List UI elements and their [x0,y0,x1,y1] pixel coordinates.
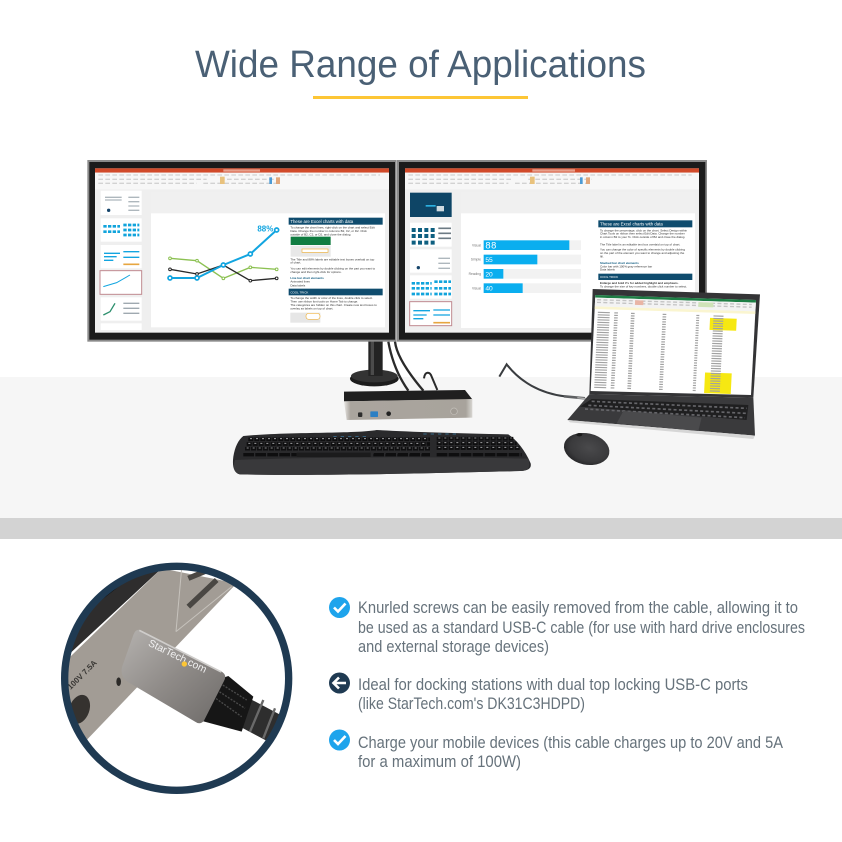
detail photo: cable plugged into dock [63,566,293,790]
feature 2: (like StarTech.com's DK31C3HDPD) [358,695,585,713]
docking station [344,390,472,420]
slide notes: Data labels [290,283,306,287]
braided cable [242,700,279,740]
dock panel [63,568,237,740]
icon: check [329,597,350,618]
feature 1: and external storage devices) [358,638,549,656]
slide notes: The categories are hidden on this chart. Create new text boxes to [290,303,377,307]
slide notes: Animated lines [290,280,310,284]
detail photo: cable plugged into dock: StarTech.com [146,638,208,676]
slide notes: COOL TRICK [290,290,308,294]
feature 3: for a maximum of 100W) [358,753,521,771]
bar chart: Simple [471,258,481,262]
keyboard [233,430,531,475]
icon: check [329,730,350,750]
feature 1 [329,597,805,656]
slide notes: These are Excel charts with data [290,219,354,224]
bar chart [469,240,581,293]
bar chart: 40 [485,286,493,293]
feature 2: Ideal for docking stations with dual top locking USB-C ports [358,676,748,694]
title underline [313,96,528,99]
laptop cable [499,364,588,399]
feature list [329,597,805,771]
slide notes: Line bar chart elements [290,276,324,280]
slide notes [289,218,383,323]
slide notes: change and then right-click for options. [290,270,342,274]
line chart [168,225,279,282]
slide notes: To change the chart lines, right-click on the chart and select Edit [290,226,375,230]
slide notes: overlay as labels on top of chart. [290,306,333,310]
line chart: 88% [257,225,273,234]
feature 3 [329,730,783,771]
bar chart: Reading [469,272,481,276]
slide notes: of chart. [290,261,301,265]
slide notes: To change the percentage, click on the chart. Select Design within [600,228,687,232]
monitor: right [397,160,707,342]
slide notes: fill. [600,255,604,259]
bar chart: 55 [485,257,493,264]
slide notes: Data labels [600,268,615,272]
monitor: left [87,160,397,342]
slide notes: To change the size of key numbers, double click number to select. [600,285,687,289]
slide notes: COOL TRICK [600,275,618,279]
slide notes: outside of B2, C2, or D2, and close the dialog. [290,232,351,236]
slide notes: These are Excel charts with data [600,222,663,227]
mouse [561,429,612,469]
slide notes: in column B2 to your %. Click outside of B2 and close the dialog. [600,235,685,239]
bar chart: Visual [472,286,481,290]
slide notes: Chart Tools on ribbon then select Edit Data. Change the number [600,232,685,236]
slide notes: Enlarge and bold #'s for added highlight and emphasis. [600,281,679,285]
bar chart: 20 [485,271,493,278]
bar chart: 88 [485,241,497,251]
slide notes: Data. Change the number in columns B2, C2, or D2. Click [290,229,367,233]
circle frame [65,566,289,790]
slide notes: on the part of the element you want to change and adjusting the [600,251,685,255]
detail photo: cable plugged into dock: 100V 7.5A [66,658,99,691]
monitor stand and cables [350,340,437,391]
title: Wide Range of Applications [195,44,646,86]
slide notes: Then use ribbon font tools on Home Tab to change. [290,299,358,303]
desk surface [0,377,842,539]
slide notes: Stacked bar chart elements [600,261,639,265]
slide notes: To change the width or color of the lines, double click to select. [290,296,373,300]
knurled screw [201,676,253,732]
icon: left arrow [329,672,350,694]
slide notes: The Title label is an editable text box overlaid on top of chart. [600,242,680,246]
feature 1: Knurled screws can be easily removed from the cable, allowing it to [358,599,798,617]
spreadsheet [591,295,756,395]
slide notes: You can change the color of specific elements by double clicking [600,247,685,251]
screen: presentation app [95,168,389,333]
feature 2 [329,672,748,713]
laptop with spreadsheet [499,289,760,439]
feature 3: Charge your mobile devices (this cable charges up to 20V and 5A [358,734,783,752]
slide notes [598,220,692,289]
metal connector [122,630,225,723]
slide notes: The Title and 88% labels are editable text boxes overlaid on top [290,257,375,261]
slide notes: Color bar with 100% gray reference bar [600,264,652,268]
screen: presentation app [405,168,699,333]
bar chart: Visual [472,243,481,247]
slide notes: You can edit elements by double clicking on the part you want to [290,266,376,270]
